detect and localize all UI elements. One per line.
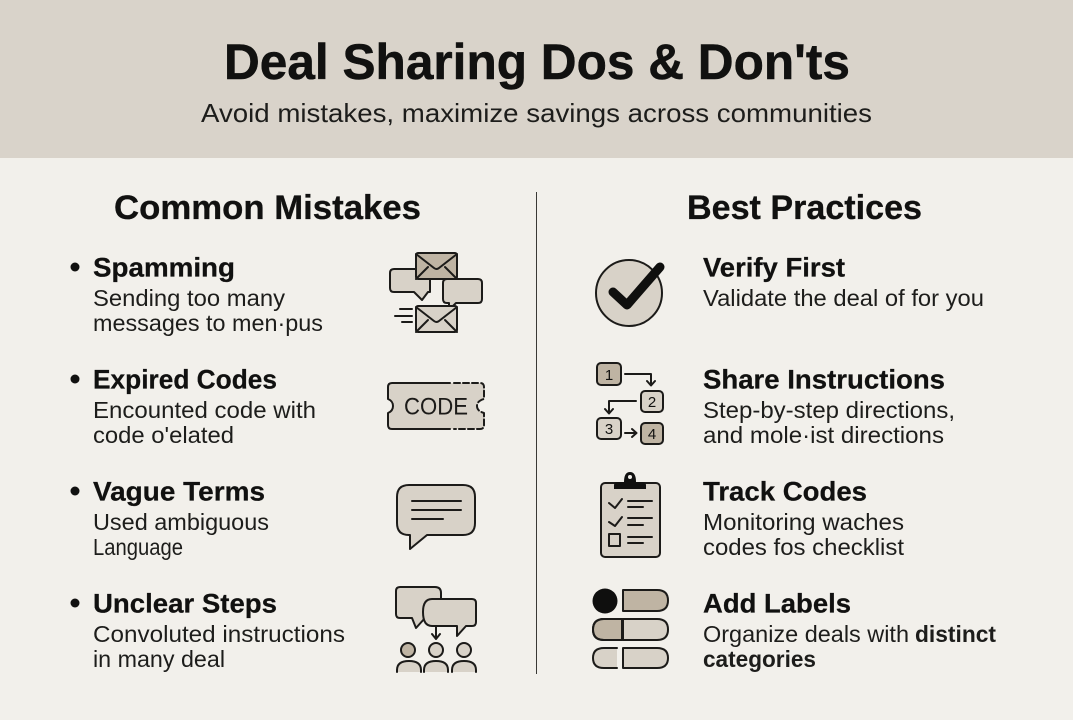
item: verify first: Validate the deal of for you (703, 285, 984, 311)
item: share instructions: Step-by-step directions, (703, 397, 955, 423)
item: expired codes: Expired Codes (93, 364, 277, 394)
icon: code ticket (388, 383, 484, 429)
icon: clipboard checklist (601, 472, 660, 557)
item: add labels: distinct (915, 621, 996, 647)
item: track codes: Track Codes (703, 476, 867, 506)
panel: common mistakes (70, 189, 484, 672)
icon: numbered steps: 2 (648, 394, 656, 411)
item: share instructions: and mole·ist directions (703, 422, 944, 448)
icon: numbered steps: 3 (605, 421, 613, 438)
icon: numbered steps: 4 (648, 426, 656, 443)
item: spamming: messages to men·pus (93, 310, 323, 336)
title: Deal Sharing Dos & Don'ts (224, 34, 850, 90)
icon: numbered steps (597, 363, 663, 444)
item: unclear steps: Convoluted instructions (93, 621, 345, 647)
item: add labels: categories (703, 646, 816, 672)
heading: common mistakes: Common Mistakes (114, 189, 421, 227)
item: share instructions: Share Instructions (703, 364, 945, 394)
heading: best practices: Best Practices (687, 189, 922, 227)
item: vague terms (70, 476, 269, 560)
item: verify first (703, 252, 984, 311)
subtitle: Avoid mistakes, maximize savings across communities (201, 98, 872, 128)
item: vague terms: Language (93, 534, 183, 560)
item: unclear steps: in many deal (93, 646, 225, 672)
item: expired codes (70, 364, 316, 448)
item: expired codes: Encounted code with (93, 397, 316, 423)
item: track codes: Monitoring waches (703, 509, 904, 535)
item: spamming: Sending too many (93, 285, 286, 311)
item: spamming: Spamming (93, 252, 235, 282)
item: vague terms: Vague Terms (93, 476, 265, 506)
icon: bubbles and people (396, 587, 476, 672)
icon: label pills (592, 588, 668, 668)
item: vague terms: Used ambiguous (93, 509, 269, 535)
item: track codes: codes fos checklist (703, 534, 905, 560)
item: track codes (703, 476, 905, 560)
icon: code ticket: CODE (404, 394, 468, 420)
header band (0, 0, 1073, 158)
item: verify first: Verify First (703, 252, 845, 282)
item: unclear steps (70, 588, 345, 672)
item: spamming (70, 252, 323, 336)
icon: envelopes and speech bubbles (390, 253, 482, 332)
item: unclear steps: Unclear Steps (93, 588, 277, 618)
panel: best practices (592, 189, 996, 672)
icon: check circle (596, 260, 662, 326)
icon: numbered steps: 1 (605, 367, 613, 384)
item: add labels (703, 588, 996, 672)
item: add labels: Organize deals with (703, 621, 909, 647)
icon: speech bubble (397, 485, 475, 549)
item: add labels: Add Labels (703, 588, 851, 618)
item: expired codes: code o'elated (93, 422, 234, 448)
item: share instructions (703, 364, 955, 448)
